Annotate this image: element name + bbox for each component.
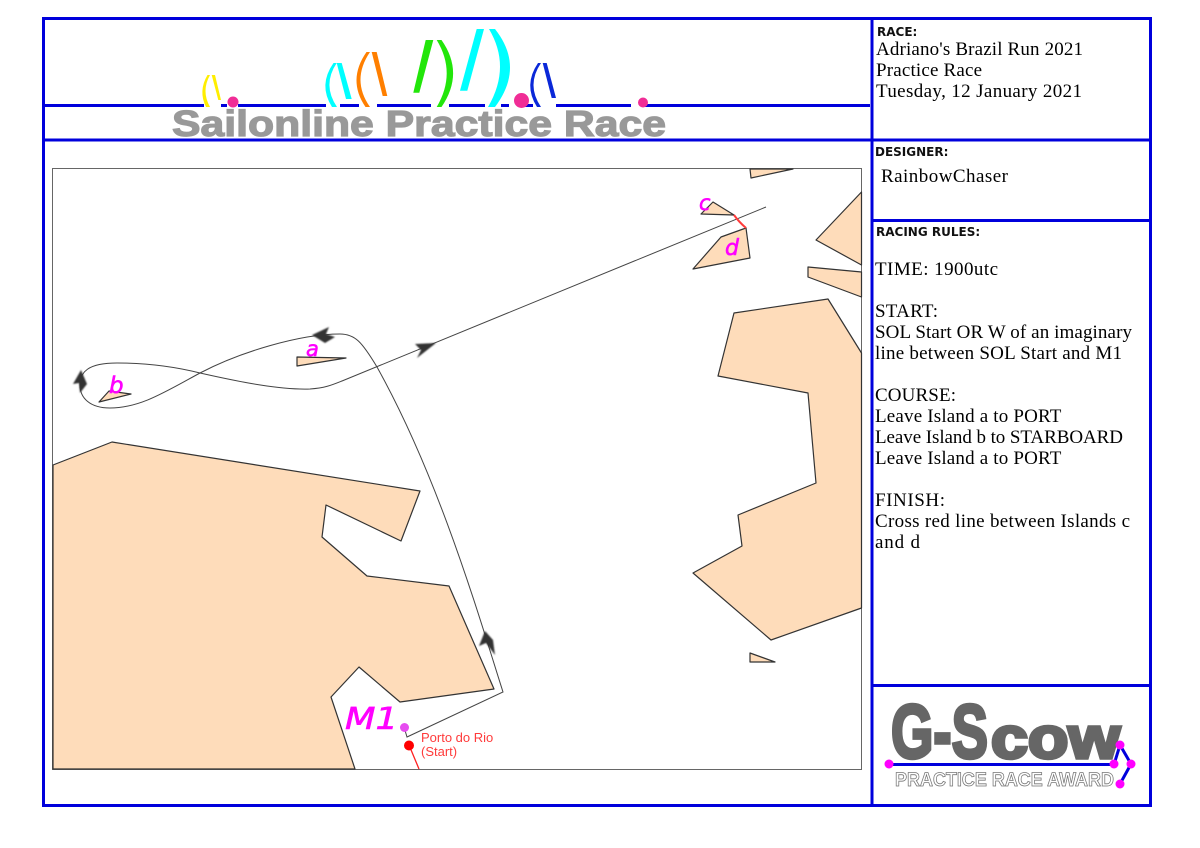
label: a: a [306,337,319,361]
label: b: b [109,373,124,399]
rules text: COURSE: [875,385,956,406]
label: M1: M1 [345,702,398,737]
header wave line [45,104,870,107]
panel: racing rules [875,225,1137,553]
logo wordmark: G-S [891,690,988,775]
rules text: Leave Island b to STARBOARD [875,427,1123,448]
rules text: Cross red line between Islands c [875,511,1130,532]
label: Porto do Rio: (Start) [421,744,457,759]
icon: cyan sailboat small [325,63,352,107]
icon: orange sailboat [356,52,387,107]
heading: race: RACE: [877,25,917,39]
panel: header banner [45,29,870,144]
race marks [228,93,648,108]
start line [409,745,419,769]
mark M1 [400,723,409,732]
course arrows [73,327,495,655]
label: d: d [725,236,740,261]
rules text: FINISH: [875,490,945,511]
designer name: RainbowChaser [881,166,1009,187]
map frame [52,168,862,770]
panel: race details [876,25,1083,102]
rules text: Leave Island a to PORT [875,448,1062,469]
heading: designer: DESIGNER: [875,145,948,159]
rules text: SOL Start OR W of an imaginary [875,322,1132,343]
panel: G-Scow award logo [884,690,1136,791]
icon: blue sailboat [530,63,556,107]
rules text: START: [875,301,938,322]
race text: Adriano's Brazil Run 2021 [876,39,1083,60]
rules text: line between SOL Start and M1 [875,343,1122,364]
logo line and marks [884,740,1136,788]
logo wordmark: cow [991,706,1121,771]
icon: green sailboat [413,40,453,107]
chart: course map [52,168,862,770]
course track [80,207,766,737]
icon: cyan sailboat large [460,29,510,107]
label: Porto do Rio: Porto do Rio [421,730,493,745]
rules text: TIME: 1900utc [875,259,998,280]
land masses [53,169,862,769]
rules text: and d [875,532,920,553]
heading: racing rules: RACING RULES: [876,225,980,239]
rules text: Leave Island a to PORT [875,406,1062,427]
panel: designer [875,145,1009,187]
race text: Tuesday, 12 January 2021 [876,81,1082,102]
start marker [404,740,414,750]
banner title: Sailonline Practice Race [172,103,666,144]
finish line between islands c and d [734,215,746,228]
icon: yellow sailboat [202,75,221,107]
label: c: c [699,191,711,215]
race text: Practice Race [876,60,982,81]
logo subtitle: PRACTICE RACE AWARD [895,770,1114,791]
